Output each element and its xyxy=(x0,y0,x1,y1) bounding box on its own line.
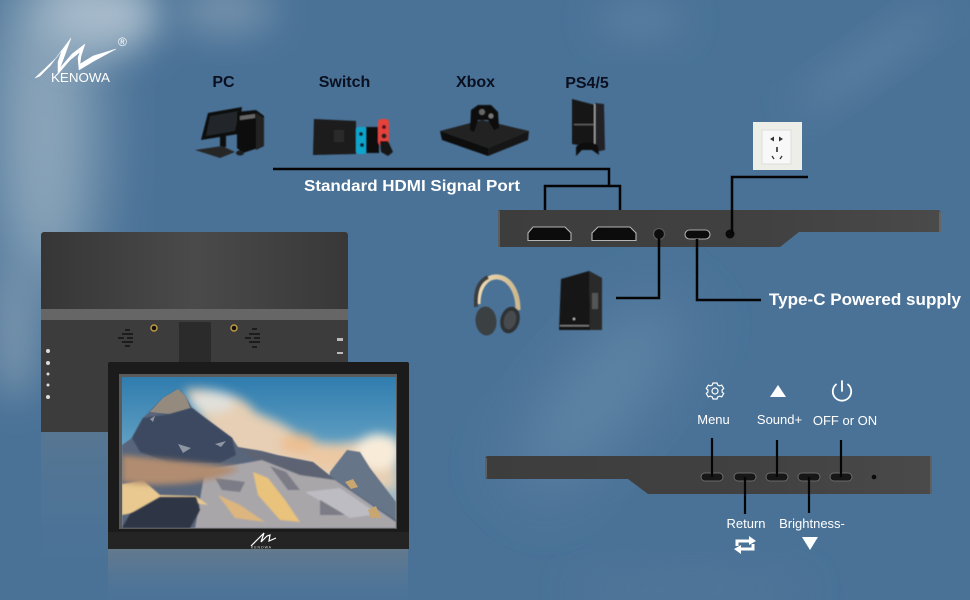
reflection under monitors xyxy=(41,432,408,600)
port icons xyxy=(337,338,343,354)
button: Menu xyxy=(701,473,723,481)
panel: monitor back view xyxy=(41,232,348,432)
icon: up triangle xyxy=(770,385,786,397)
label: Type-C Powered supply: Type-C Powered supply xyxy=(769,290,962,309)
stand recess xyxy=(179,322,211,366)
icon: repeat xyxy=(734,536,756,554)
button labels: OFF or ON xyxy=(813,413,877,428)
device labels: Xbox xyxy=(456,74,495,91)
connector: Type-C line xyxy=(697,239,761,300)
small logo: KENOWA xyxy=(251,546,272,550)
button: Return xyxy=(734,473,756,481)
DC power port xyxy=(726,230,734,238)
far ridge xyxy=(320,450,396,528)
icon: speaker xyxy=(559,271,602,330)
panel: monitor front view xyxy=(108,362,409,550)
button labels: Return xyxy=(726,516,766,531)
main mountain xyxy=(122,389,396,528)
icon: down triangle xyxy=(802,537,818,550)
button labels xyxy=(697,412,877,531)
speaker grille left xyxy=(118,330,133,346)
icon: headphones xyxy=(474,277,523,337)
HDMI port 2 xyxy=(592,227,636,240)
small logo xyxy=(251,533,276,550)
device labels: Switch xyxy=(319,74,370,91)
hinge stripe xyxy=(41,309,348,320)
side button icons xyxy=(46,349,50,399)
heading: Standard HDMI Signal Port: Standard HDMI Signal Port xyxy=(304,178,521,195)
connector: audio line xyxy=(616,238,659,298)
button labels: Menu xyxy=(697,412,730,427)
button: Sound+ xyxy=(766,473,788,481)
logo: KENOWA: KENOWA xyxy=(51,70,110,85)
mist band xyxy=(122,455,240,485)
audio jack xyxy=(654,228,664,240)
icon: power xyxy=(833,381,851,401)
indicator light xyxy=(872,475,876,479)
logo: KENOWA xyxy=(35,35,127,85)
icon: Switch console xyxy=(313,119,393,156)
logo: KENOWA: ® xyxy=(118,35,127,49)
dark upper rock xyxy=(132,408,236,463)
panel: side view of connector ports xyxy=(498,210,941,247)
connector: HDMI signal lines xyxy=(273,169,620,227)
snow xyxy=(195,460,396,528)
button labels: Sound+ xyxy=(757,412,802,427)
device labels xyxy=(212,74,609,92)
speaker grille right xyxy=(245,329,260,347)
shadowed foreground xyxy=(122,497,200,528)
screen image: mountain landscape xyxy=(122,377,400,528)
mounting hole right xyxy=(231,325,237,331)
mounting hole left xyxy=(151,325,157,331)
icon: wall socket xyxy=(753,122,802,170)
button labels: Brightness- xyxy=(779,516,845,531)
Type-C port xyxy=(685,230,710,239)
connector: button lines xyxy=(712,438,841,514)
icon: PlayStation console xyxy=(572,99,605,156)
icon: PC xyxy=(195,107,264,158)
HDMI port 1 xyxy=(528,227,571,240)
icon: Xbox console xyxy=(440,105,529,156)
button: Brightness- xyxy=(798,473,820,481)
clouds xyxy=(184,389,400,490)
sunlit ridges xyxy=(253,472,300,522)
button: Power xyxy=(830,473,852,481)
panel: side view of control buttons xyxy=(485,456,932,494)
device labels: PC xyxy=(212,74,235,91)
device labels: PS4/5 xyxy=(565,75,609,92)
connector: power line xyxy=(732,177,808,234)
icon: gear xyxy=(706,383,724,399)
